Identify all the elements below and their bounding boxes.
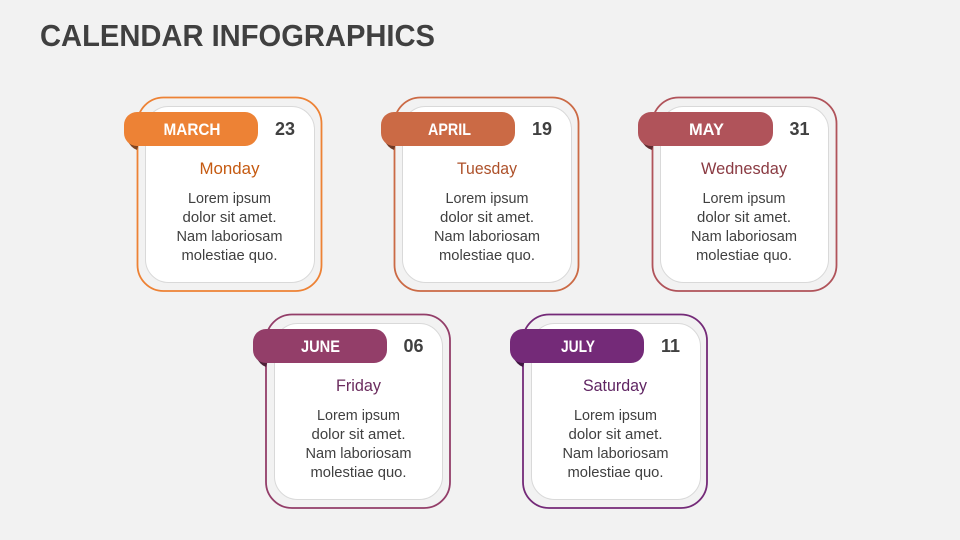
body text: March: dolor sit amet. (182, 210, 276, 226)
month tab: April (381, 112, 515, 146)
month label: June: JUNE (301, 337, 340, 356)
body text: April (434, 191, 540, 264)
body text: July: Lorem ipsum (574, 408, 657, 424)
weekday: Friday: Friday (336, 377, 382, 395)
body text: April: Nam laboriosam (434, 229, 540, 245)
body text: June: molestiae quo. (310, 465, 406, 481)
body text: June (306, 408, 412, 481)
date: 11: 11 (661, 336, 680, 356)
panel: July card (510, 314, 707, 508)
weekday: Saturday: Saturday (583, 377, 648, 395)
body text: April: dolor sit amet. (440, 210, 534, 226)
body text: June: Nam laboriosam (306, 446, 412, 462)
body text: April: molestiae quo. (439, 248, 535, 264)
panel: May card (638, 98, 836, 291)
date: 06: 06 (404, 336, 424, 356)
month label: July: JULY (561, 337, 596, 356)
weekday: Wednesday: Wednesday (701, 160, 788, 178)
body text: July: Nam laboriosam (562, 446, 668, 462)
weekday: Monday: Monday (200, 160, 260, 178)
body text: July (562, 408, 668, 481)
month label: March: MARCH (164, 120, 220, 139)
body text: March: Lorem ipsum (188, 191, 271, 207)
body text: May: dolor sit amet. (697, 210, 791, 226)
panel: April card (381, 98, 578, 291)
body text: July: dolor sit amet. (568, 427, 662, 443)
body text: June: dolor sit amet. (312, 427, 406, 443)
date: 31: 31 (790, 119, 810, 139)
panel: June card (253, 314, 450, 508)
body text: May: Nam laboriosam (691, 229, 797, 245)
body text: July: molestiae quo. (568, 465, 664, 481)
month label: May: MAY (689, 120, 725, 139)
month tab: July (510, 329, 644, 363)
title: CALENDAR INFOGRAPHICS (40, 18, 435, 53)
body text: March (176, 191, 282, 264)
body text: April: Lorem ipsum (446, 191, 528, 207)
month tab: March (124, 112, 258, 146)
body text: March: molestiae quo. (182, 248, 278, 264)
panel: March card (124, 98, 322, 291)
body text: June: Lorem ipsum (317, 408, 400, 424)
body text: May: Lorem ipsum (702, 191, 786, 207)
month label: April: APRIL (428, 120, 471, 139)
month tab: May (638, 112, 773, 146)
body text: March: Nam laboriosam (176, 229, 282, 245)
date: 23: 23 (275, 119, 295, 139)
weekday: Tuesday: Tuesday (457, 160, 518, 178)
body text: May: molestiae quo. (696, 248, 792, 264)
date: 19: 19 (532, 119, 552, 139)
body text: May (691, 191, 797, 264)
month tab: June (253, 329, 387, 363)
